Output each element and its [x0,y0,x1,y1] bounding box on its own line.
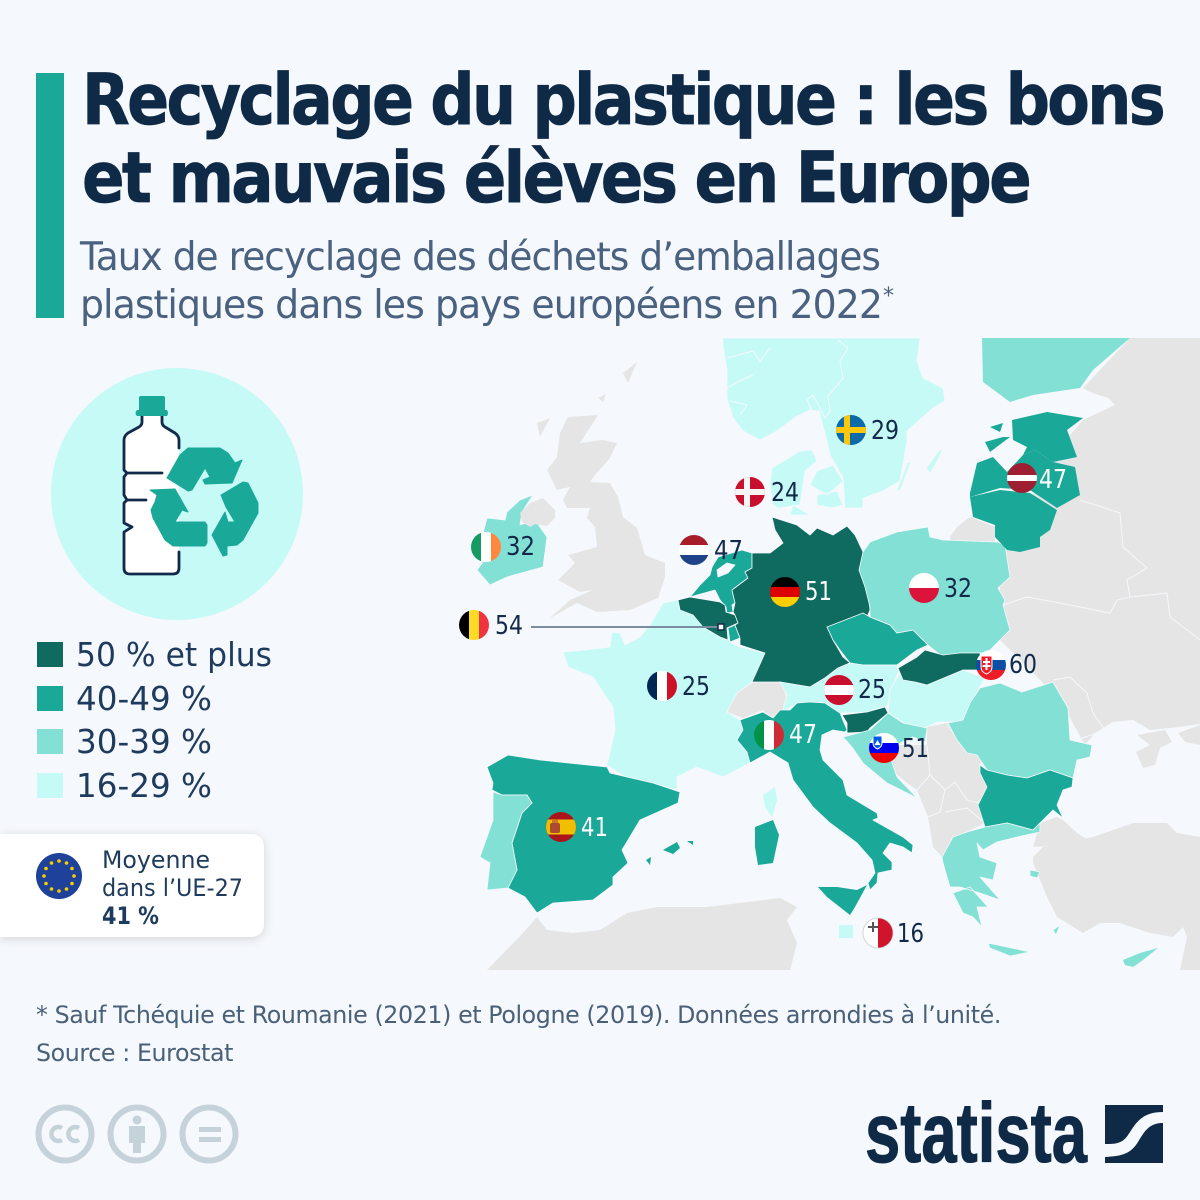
Great Britain [547,415,665,618]
Sicily [818,885,867,915]
bottle outline [124,416,179,574]
Balearic Islands [646,841,693,865]
label: Sweden: 29 [871,416,899,446]
icon: bottle and recycling symbol [51,368,303,620]
footnote and source [36,1001,1001,1067]
Norway-Sweden border and fjords [727,340,848,418]
bottle cap [136,396,168,416]
footnote and source: Source : Eurostat [36,1039,233,1067]
Greece [942,823,1060,956]
Czechia [827,613,928,665]
label: Austria: 25 [858,675,886,705]
card text: Moyenne [102,846,210,874]
Gotland and Oland [897,450,942,491]
Belgium 54 [678,597,738,640]
grey borders [917,500,1200,823]
label: Slovakia [976,650,1037,680]
Turkey in Europe [1033,817,1086,847]
label: Malta: 16 [897,919,924,949]
Netherlands 47 [690,550,752,613]
label: Spain: 41 [581,813,608,843]
Switzerland [728,682,786,718]
card text: 41 % [102,902,159,930]
France 25 [563,600,765,790]
label: Ireland: 32 [506,532,535,562]
Statista wordmark: statista [865,1086,1088,1180]
Luxembourg [728,625,740,642]
Austria 25 [780,663,898,713]
icon: attribution [110,1108,164,1160]
Crimea [1136,730,1172,768]
icon: cc [38,1108,92,1160]
bottle body [124,416,179,574]
Italy 47 [737,702,913,890]
subtitle: * [883,284,894,309]
label: Slovakia: 60 [1009,650,1037,680]
Belgium leader line [531,624,724,630]
recycling arrows [150,448,258,556]
label: Slovenia [869,733,929,764]
label: Latvia [1007,463,1067,495]
legend: 40-49: 40-49 % [76,679,212,718]
Bulgaria [978,765,1073,830]
subtitle [79,235,894,328]
legend: 16-29: 16-29 % [76,766,212,805]
Germany 51 [732,517,870,687]
Scottish islands [537,362,637,437]
label: Netherlands: 47 [714,536,743,566]
Sardinia [755,820,779,865]
label: Slovenia: 51 [902,734,929,764]
label: Malta [863,918,924,949]
label: Latvia: 47 [1039,465,1067,495]
footnote and source: * Sauf Tchéquie et Roumanie (2021) et Pologne (2019). Données arrondies à l’unité. [36,1001,1001,1029]
Norway and Sweden 29 [723,338,945,508]
non-covered countries: east [1000,338,1200,745]
label: Germany: 51 [805,577,832,607]
label: Netherlands [679,535,743,566]
subtitle: plastiques dans les pays européens en 2022 [80,283,882,328]
Croatia [843,713,927,798]
icon: no derivatives [182,1108,236,1160]
label: France [647,671,710,702]
Lithuania [970,490,1057,552]
label: Spain [546,812,608,843]
label: Ireland [471,532,535,562]
title accent bar [36,73,64,318]
Latvia 47 [970,450,1080,508]
icons: creative commons licence [38,1108,236,1160]
Estonia [985,412,1083,462]
subtitle: Taux de recyclage des déchets d’emballages [79,235,880,280]
title: et mauvais élèves en Europe [82,137,1029,219]
Slovenia 51 [842,707,888,733]
EU average card [0,834,264,937]
Caucasus coast [1178,725,1200,745]
Portugal [480,792,532,890]
label: Germany [770,577,832,607]
label: Sweden [836,415,899,446]
western Balkans [892,723,986,856]
label: Italy: 47 [789,720,817,750]
Poland 32 [859,527,1010,657]
legend [37,635,272,805]
Corsica [763,787,777,817]
label: Belgium: 54 [495,611,523,641]
label: Poland [909,573,972,604]
label: Poland: 32 [944,574,972,604]
label: Belgium [459,610,523,641]
Denmark 24 [770,450,843,515]
label: Denmark: 24 [771,478,799,508]
North Africa [487,898,797,970]
Northern Ireland [520,498,555,527]
Spain 41 [487,755,680,913]
icon: EU flag [36,853,82,899]
label: Italy [754,720,817,750]
label: France: 25 [682,672,710,702]
Romania [948,682,1092,778]
Hungary [888,670,985,730]
Finland [982,338,1130,402]
card text [102,846,243,930]
legend: 30-39: 30-39 % [76,722,212,761]
label: Denmark [735,477,799,508]
label: Austria [824,675,886,705]
card text: dans l’UE-27 [102,874,243,902]
Slovakia 60 [898,650,983,685]
Cyprus [1123,948,1158,967]
Anatolia [1033,823,1200,970]
legend: 50 et plus: 50 % et plus [76,635,272,674]
Ireland 32 [477,495,547,585]
Kaliningrad [950,517,995,542]
map of Europe [477,338,1200,970]
title [82,59,1163,219]
Malta marker [839,925,853,938]
Statista logo mark [1105,1105,1163,1163]
